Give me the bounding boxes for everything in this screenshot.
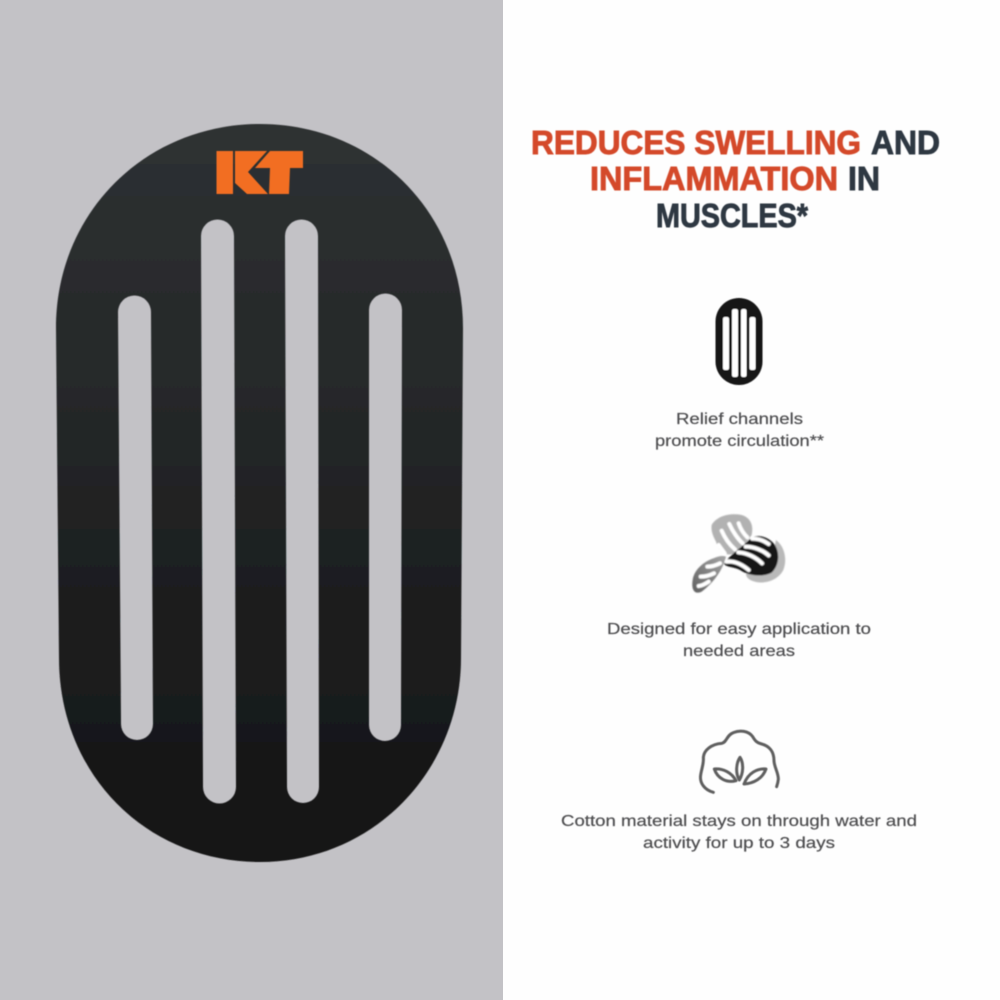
heading: [531, 124, 940, 234]
heading: AND: [871, 124, 940, 161]
text: relief channels: Relief channels: [676, 411, 803, 428]
text: easy application: Designed for easy application to: [607, 621, 871, 638]
logo: KT: [216, 151, 303, 194]
heading: INFLAMMATION: [590, 160, 838, 197]
heading: REDUCES SWELLING: [531, 124, 861, 161]
grey background: [0, 0, 503, 1000]
text: easy application: [607, 621, 871, 660]
icon: cotton boll: [700, 731, 778, 792]
heading: IN: [848, 160, 880, 197]
text: easy application: needed areas: [683, 643, 795, 660]
patch: slotted black tape: [56, 124, 463, 862]
panel: product photo: [0, 0, 503, 1000]
icon: relief channels: [716, 298, 762, 385]
text: relief channels: [655, 411, 824, 450]
text: cotton material: Cotton material stays on through water and: [561, 813, 917, 830]
heading: MUSCLES*: [656, 197, 808, 234]
text: cotton material: activity for up to 3 days: [643, 835, 835, 852]
icon: hand applying tape: [692, 514, 785, 593]
text: cotton material: [561, 813, 917, 852]
text: relief channels: promote circulation**: [655, 433, 824, 450]
